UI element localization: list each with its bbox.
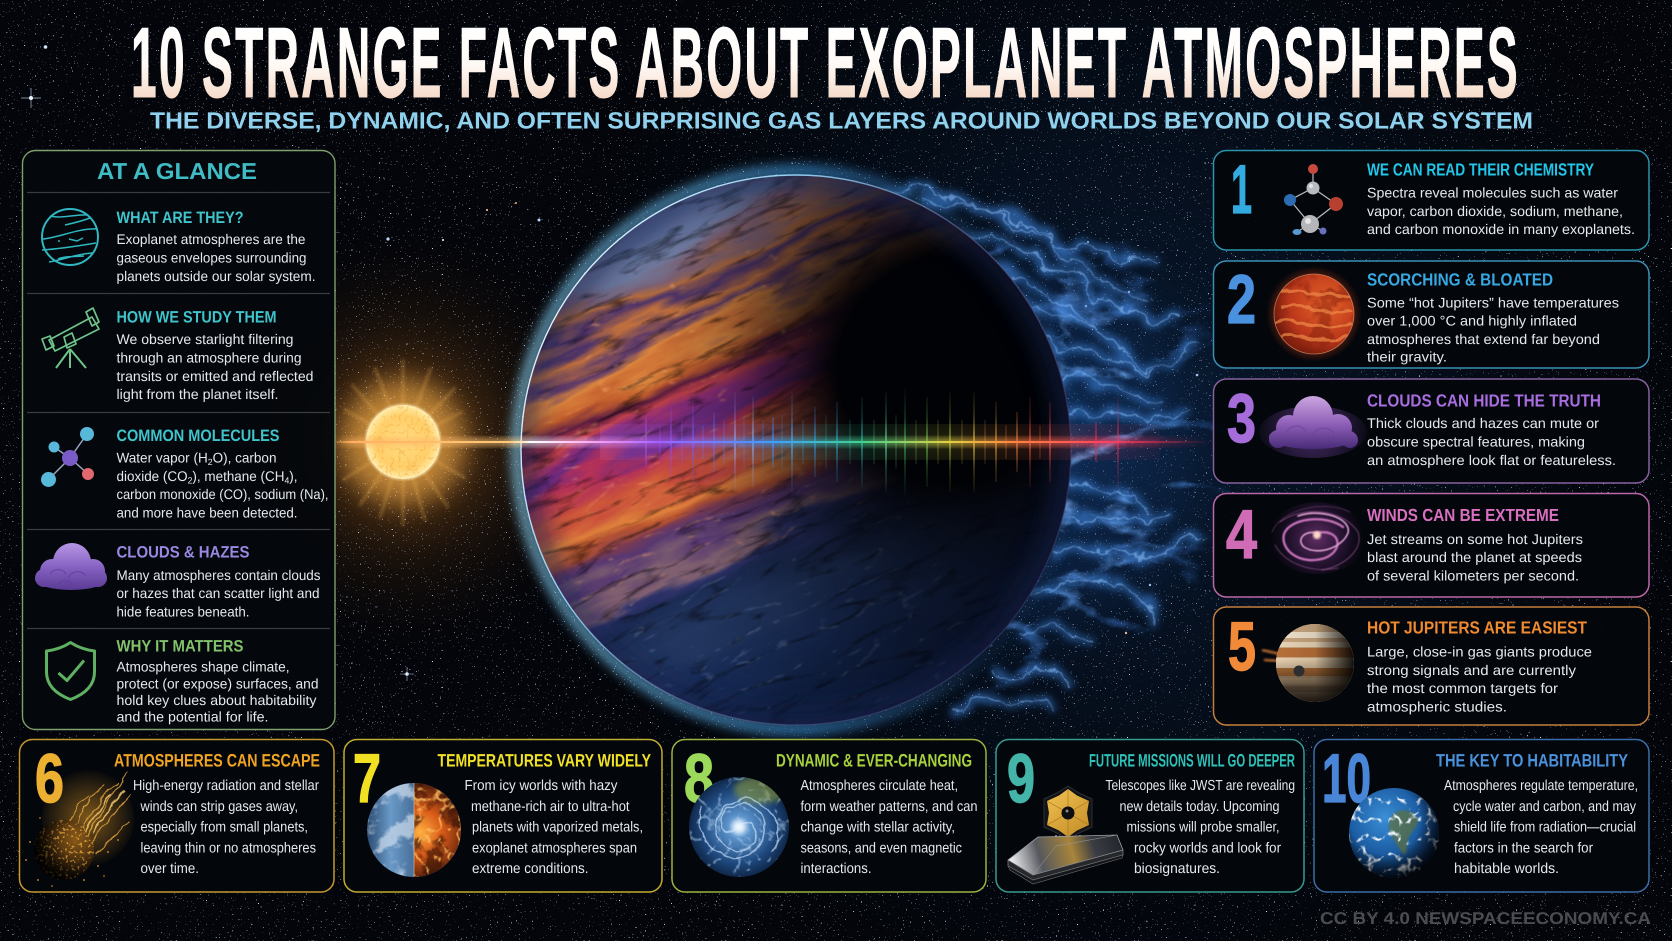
- text: common molecules: 2: [208, 457, 213, 467]
- icon: banded gas giant: [1260, 624, 1354, 702]
- text: what are they: planets outside our solar system.: [116, 268, 316, 284]
- credit line: CC BY 4.0 NEWSPACEECONOMY.CA: [1320, 909, 1651, 928]
- text: common molecules: and more have been detected.: [116, 504, 298, 520]
- card 9: future missions will go deeper: [996, 740, 1304, 892]
- card 5: hot jupiters are easiest: [1214, 607, 1649, 725]
- text: Spectra reveal molecules such as water: [1367, 184, 1618, 200]
- heading: FUTURE MISSIONS WILL GO DEEPER: [1089, 750, 1295, 770]
- illustration: spectrum beam with absorption lines: [335, 387, 1210, 497]
- icon: pink wind swirl: [1267, 502, 1367, 574]
- heading: CLOUDS CAN HIDE THE TRUTH: [1367, 390, 1601, 410]
- text: form weather patterns, and can: [800, 799, 978, 815]
- number 7: 7: [353, 740, 381, 817]
- heading: what are they: WHAT ARE THEY?: [116, 209, 244, 227]
- text: how we study them: transits or emitted and reflected: [116, 368, 314, 384]
- icon: half ice half lava planet: [367, 783, 461, 877]
- text: what are they: Exoplanet atmospheres are the: [116, 231, 306, 247]
- section: what are they: [42, 209, 316, 284]
- text: [1367, 184, 1635, 237]
- heading: common molecules: COMMON MOLECULES: [116, 427, 280, 445]
- text: rocky worlds and look for: [1134, 840, 1281, 856]
- icon: space telescope: [1008, 786, 1123, 884]
- text: common molecules: dioxide (CO: [116, 468, 190, 484]
- text: cycle water and carbon, and may: [1453, 799, 1637, 815]
- text: [1367, 531, 1583, 584]
- text: winds can strip gases away,: [140, 799, 298, 815]
- icon: planet losing gas: [25, 770, 134, 887]
- number 1: 1: [1231, 151, 1252, 228]
- card 1: we can read their chemistry: [1214, 150, 1649, 250]
- text: why it matters: hold key clues about habitability: [116, 692, 316, 708]
- text: common molecules: 2: [188, 476, 192, 486]
- heading: SCORCHING & BLOATED: [1367, 270, 1553, 290]
- card 8: dynamic and ever-changing: [672, 740, 986, 892]
- text: new details today. Upcoming: [1120, 799, 1280, 815]
- card 2: scorching and bloated: [1214, 261, 1649, 368]
- heading: ATMOSPHERES CAN ESCAPE: [114, 750, 320, 770]
- number 8: 8: [684, 740, 714, 817]
- icon: shield with check: [46, 642, 94, 700]
- text: shield life from radiation—crucial: [1454, 820, 1636, 836]
- heading: how we study them: HOW WE STUDY THEM: [116, 308, 276, 326]
- text: From icy worlds with hazy: [464, 778, 618, 794]
- text: common molecules: ),: [289, 468, 298, 484]
- subtitle: THE DIVERSE, DYNAMIC, AND OFTEN SURPRISING GAS LAYERS AROUND WORLDS BEYOND OUR SOLAR SYSTEM: [150, 108, 1533, 134]
- text: clouds and hazes: [116, 567, 320, 620]
- text: clouds and hazes: Many atmospheres contain clouds: [116, 567, 320, 583]
- text: clouds and hazes: or hazes that can scatter light and: [116, 585, 320, 601]
- text: methane-rich air to ultra-hot: [471, 799, 630, 815]
- number 4: 4: [1226, 496, 1257, 573]
- text: extreme conditions.: [472, 861, 588, 877]
- text: the most common targets for: [1367, 680, 1558, 696]
- card 6: atmospheres can escape: [20, 740, 334, 892]
- text: [800, 778, 978, 877]
- text: and carbon monoxide in many exoplanets.: [1367, 221, 1635, 237]
- text: why it matters: protect (or expose) surfaces, and: [116, 676, 318, 692]
- text: common molecules: 4: [284, 476, 289, 486]
- text: of several kilometers per second.: [1367, 568, 1579, 584]
- number 2: 2: [1227, 261, 1256, 338]
- card 3: clouds can hide the truth: [1214, 379, 1649, 483]
- card 4: winds can be extreme: [1214, 494, 1649, 597]
- text: planets with vaporized metals,: [472, 820, 643, 836]
- text: [1367, 415, 1616, 468]
- text: over time.: [140, 861, 199, 877]
- heading: why it matters: WHY IT MATTERS: [116, 638, 244, 656]
- text: obscure spectral features, making: [1367, 434, 1585, 450]
- text: their gravity.: [1367, 348, 1447, 364]
- text: common molecules: carbon monoxide (CO), sodium (Na),: [116, 486, 328, 502]
- text: seasons, and even magnetic: [800, 840, 962, 856]
- text: atmospheric studies.: [1367, 698, 1507, 714]
- text: Atmospheres circulate heat,: [800, 778, 958, 794]
- illustration: star: [341, 360, 465, 525]
- text: strong signals and are currently: [1367, 662, 1576, 678]
- text: Telescopes like JWST are revealing: [1106, 778, 1295, 794]
- text: High-energy radiation and stellar: [133, 778, 319, 794]
- icon: glowing cloud: [1259, 396, 1367, 458]
- panel: at a glance: [22, 150, 335, 730]
- card 7: temperatures vary widely: [344, 740, 662, 892]
- icon: molecule: [41, 427, 94, 487]
- heading: THE KEY TO HABITABILITY: [1436, 750, 1628, 770]
- text: how we study them: light from the planet itself.: [116, 386, 278, 402]
- text: leaving thin or no atmospheres: [140, 840, 316, 856]
- section: why it matters: [46, 638, 318, 724]
- text: [464, 778, 643, 877]
- text: biosignatures.: [1134, 861, 1220, 877]
- heading: HOT JUPITERS ARE EASIEST: [1367, 618, 1587, 638]
- text: especially from small planets,: [140, 820, 308, 836]
- text: why it matters: [116, 658, 318, 724]
- text: why it matters: and the potential for life.: [116, 708, 268, 724]
- heading: at a glance: AT A GLANCE: [97, 158, 257, 184]
- heading: WE CAN READ THEIR CHEMISTRY: [1367, 160, 1594, 180]
- heading: DYNAMIC & EVER-CHANGING: [776, 750, 972, 770]
- icon: hot red planet: [1266, 266, 1362, 362]
- text: clouds and hazes: hide features beneath.: [116, 604, 250, 620]
- illustration: blue atmosphere tendrils: [880, 170, 1230, 740]
- icon: purple cloud: [35, 543, 107, 590]
- text: exoplanet atmospheres span: [472, 840, 637, 856]
- text: Some “hot Jupiters” have temperatures: [1367, 294, 1619, 310]
- icon: earth-like planet: [1349, 788, 1439, 878]
- number 3: 3: [1227, 380, 1256, 457]
- text: Thick clouds and hazes can mute or: [1367, 415, 1599, 431]
- number 10: 10: [1322, 740, 1371, 817]
- section: how we study them: [42, 308, 314, 402]
- text: how we study them: through an atmosphere during: [116, 350, 302, 366]
- icon: banded planet: [42, 209, 98, 265]
- text: missions will probe smaller,: [1126, 820, 1280, 836]
- number 5: 5: [1228, 608, 1256, 685]
- icon: telescope: [42, 308, 99, 368]
- text: common molecules: Water vapor (H: [116, 450, 211, 466]
- number 6: 6: [35, 740, 64, 817]
- text: common molecules: O), carbon: [213, 450, 276, 466]
- text: [1367, 644, 1592, 714]
- text: why it matters: Atmospheres shape climate,: [116, 658, 290, 674]
- text: how we study them: [116, 331, 314, 402]
- text: common molecules: ), methane (CH: [192, 468, 284, 484]
- heading: clouds and hazes: CLOUDS & HAZES: [116, 544, 250, 562]
- text: blast around the planet at speeds: [1367, 549, 1582, 565]
- text: [133, 778, 319, 877]
- icon: storm planet: [689, 776, 789, 877]
- section: common molecules: [41, 427, 328, 520]
- text: Jet streams on some hot Jupiters: [1367, 531, 1583, 547]
- text: [1367, 294, 1619, 364]
- section: clouds and hazes: [35, 543, 320, 620]
- heading: WINDS CAN BE EXTREME: [1367, 505, 1559, 525]
- text: [1444, 778, 1638, 877]
- text: atmospheres that extend far beyond: [1367, 331, 1600, 347]
- text: factors in the search for: [1454, 840, 1593, 856]
- text: how we study them: We observe starlight filtering: [116, 331, 294, 347]
- text: over 1,000 °C and highly inflated: [1367, 312, 1577, 328]
- icon: molecule: [1284, 164, 1343, 235]
- text: common molecules: [116, 450, 328, 520]
- text: an atmosphere look flat or featureless.: [1367, 452, 1616, 468]
- number 9: 9: [1007, 740, 1035, 817]
- heading: TEMPERATURES VARY WIDELY: [438, 750, 651, 770]
- illustration: exoplanet: [502, 157, 1072, 739]
- text: habitable worlds.: [1454, 861, 1559, 877]
- card 10: the key to habitability: [1314, 740, 1649, 892]
- text: change with stellar activity,: [800, 820, 955, 836]
- text: what are they: [116, 231, 316, 284]
- text: Large, close-in gas giants produce: [1367, 644, 1592, 660]
- text: vapor, carbon dioxide, sodium, methane,: [1367, 203, 1623, 219]
- text: [1106, 778, 1295, 877]
- text: interactions.: [800, 861, 872, 877]
- text: what are they: gaseous envelopes surrounding: [116, 250, 306, 266]
- text: Atmospheres regulate temperature,: [1444, 778, 1638, 794]
